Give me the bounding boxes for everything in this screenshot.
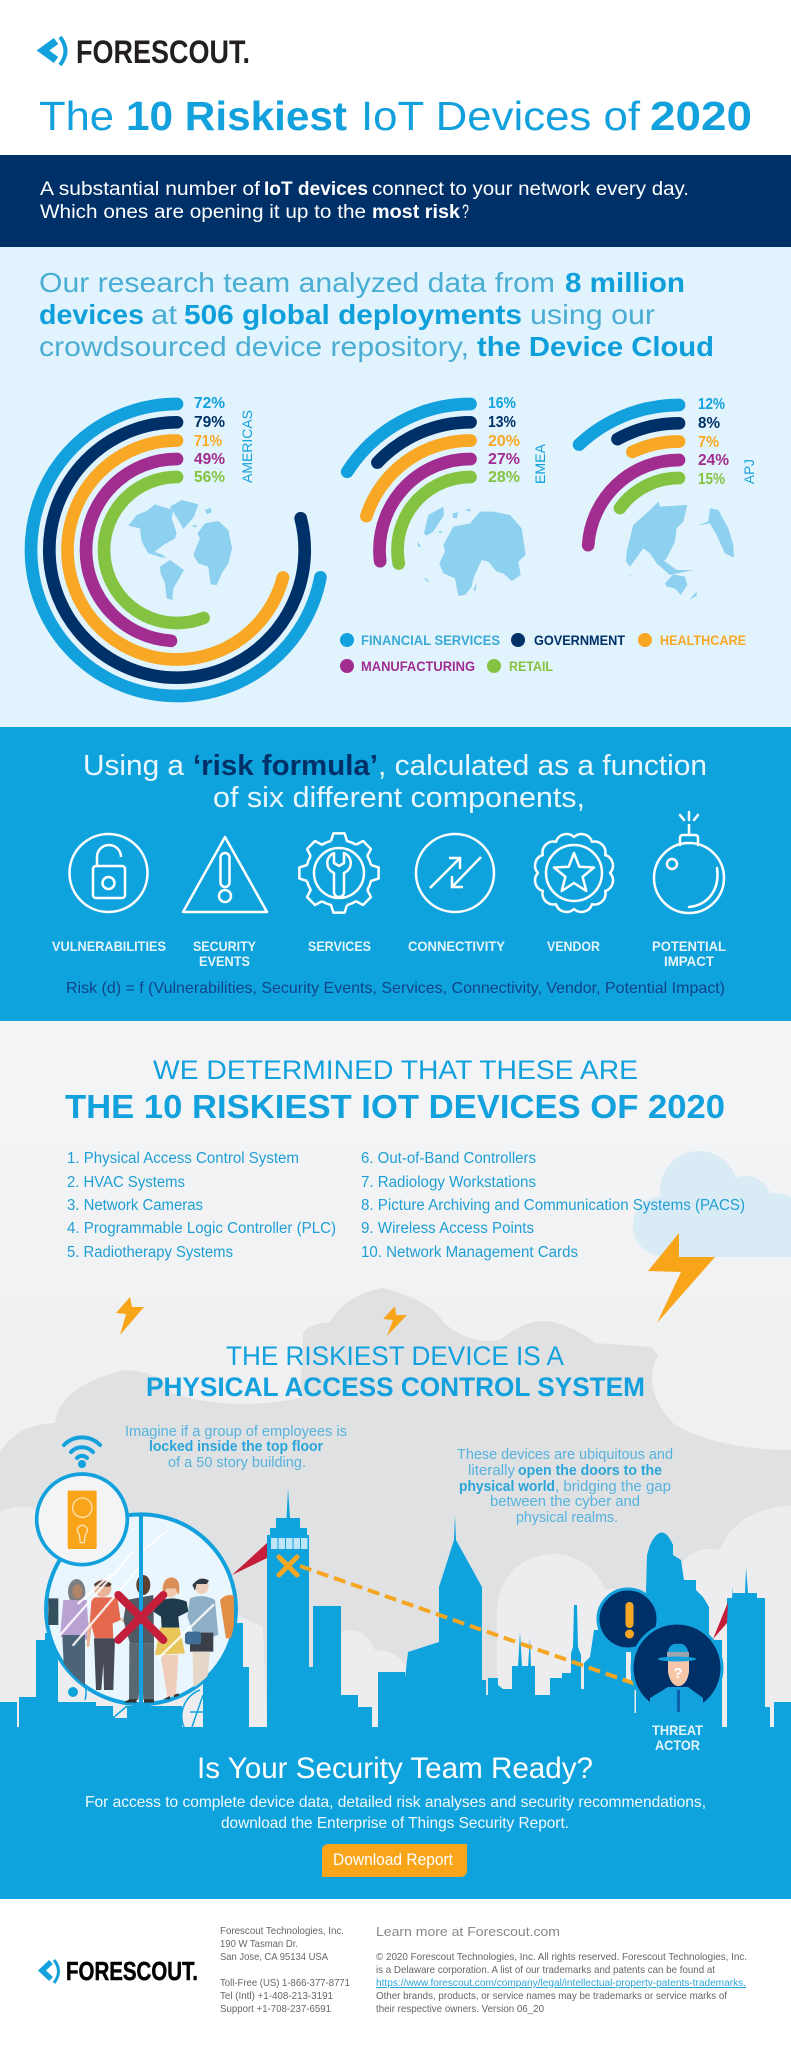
region label: APJ: APJ bbox=[742, 459, 757, 484]
legal text: their respective owners. Version 06_20 bbox=[376, 2003, 544, 2015]
map: Americas bbox=[128, 500, 232, 600]
legal text: © 2020 Forescout Technologies, Inc. All rights reserved. Forescout Technologies, Inc. bbox=[376, 1951, 747, 1963]
values: Americas: 72% bbox=[194, 395, 225, 412]
heading: top ten: THE 10 RISKIEST IOT DEVICES OF 2020 bbox=[65, 1088, 725, 1125]
ring chart: APJ bbox=[533, 405, 791, 697]
text: ubiquitous devices: physical realms. bbox=[516, 1510, 618, 1526]
text: imagine scenario: of a 50 story building. bbox=[168, 1455, 306, 1471]
icon: open padlock bbox=[70, 834, 148, 912]
device list: 4. Programmable Logic Controller (PLC) bbox=[67, 1220, 336, 1237]
values: EMEA: 16% bbox=[488, 395, 516, 412]
icon: connectivity arrows bbox=[416, 834, 494, 912]
component labels bbox=[52, 938, 726, 969]
research statement bbox=[39, 267, 714, 362]
heading: top ten: WE DETERMINED THAT THESE ARE bbox=[153, 1055, 638, 1085]
legal text: Other brands, products, or service names may be trademarks or service marks of bbox=[376, 1990, 727, 2002]
heading: risk formula: ‘risk formula’ bbox=[193, 750, 378, 782]
device list bbox=[67, 1150, 745, 1261]
icon: vendor star badge bbox=[535, 834, 613, 912]
legend: GOVERNMENT bbox=[534, 633, 626, 648]
contact details: Toll-Free (US) 1-866-377-8771 bbox=[220, 1977, 350, 1989]
device list: 8. Picture Archiving and Communication Systems (PACS) bbox=[361, 1197, 745, 1214]
values: EMEA: 28% bbox=[488, 469, 520, 486]
heading: risk formula: Using a bbox=[83, 750, 185, 782]
label: threat actor: THREAT bbox=[652, 1722, 703, 1738]
text: ubiquitous devices bbox=[457, 1447, 673, 1526]
research statement: the Device Cloud bbox=[477, 331, 714, 362]
icon: warning triangle bbox=[183, 837, 267, 912]
title: 10 Riskiest bbox=[126, 93, 347, 139]
device list: 9. Wireless Access Points bbox=[361, 1220, 534, 1237]
text: ubiquitous devices: open the doors to the bbox=[518, 1463, 662, 1479]
ring chart: Americas bbox=[31, 404, 323, 696]
legend: HEALTHCARE bbox=[660, 633, 746, 648]
icon: large lightning bolt bbox=[648, 1233, 715, 1323]
device list: 1. Physical Access Control System bbox=[67, 1150, 299, 1167]
title: 2020 bbox=[650, 93, 752, 139]
footer logo bbox=[42, 1956, 198, 1986]
icon: small lightning bolt left bbox=[116, 1297, 144, 1335]
panel: intro band: IoT devices bbox=[264, 179, 368, 200]
panel: research data bbox=[0, 247, 791, 727]
region label: Americas: AMERICAS bbox=[240, 410, 255, 483]
panel: intro band: ? bbox=[462, 202, 469, 223]
glass reflections bbox=[60, 1530, 213, 1658]
research statement: 506 global deployments bbox=[184, 299, 522, 330]
device list: 7. Radiology Workstations bbox=[361, 1174, 536, 1191]
component labels: SERVICES bbox=[308, 938, 371, 954]
device list: 2. HVAC Systems bbox=[67, 1174, 185, 1191]
values: Americas: 56% bbox=[194, 469, 225, 486]
legend: MANUFACTURING bbox=[361, 659, 475, 674]
values: APJ: 8% bbox=[698, 415, 720, 432]
skyline details bbox=[17, 1652, 636, 1727]
contact details: San Jose, CA 95134 USA bbox=[220, 1951, 328, 1963]
title bbox=[39, 93, 752, 139]
call to action text: For access to complete device data, detailed risk analyses and security recommendations, bbox=[85, 1794, 706, 1811]
call to action text bbox=[85, 1794, 706, 1832]
values: APJ: 12% bbox=[698, 396, 725, 413]
heading: risk formula: of six different components, bbox=[213, 782, 585, 814]
research statement: crowdsourced device repository, bbox=[39, 331, 469, 362]
values: Americas: 79% bbox=[194, 414, 225, 431]
title: The bbox=[39, 93, 114, 139]
red pointer to threat actor bbox=[713, 1602, 728, 1639]
header panel bbox=[0, 0, 791, 155]
door divider bbox=[139, 1515, 143, 1703]
device list: 5. Radiotherapy Systems bbox=[67, 1244, 233, 1261]
red pointer to tower bbox=[232, 1543, 267, 1575]
light foreground clouds bbox=[0, 1505, 791, 1730]
text: imagine scenario: Imagine if a group of employees is bbox=[125, 1424, 347, 1440]
icon: bomb bbox=[654, 812, 724, 913]
component labels: POTENTIAL bbox=[652, 938, 726, 954]
contact details: Tel (Intl) +1-408-213-3191 bbox=[220, 1990, 333, 2002]
contact details: 190 W Tasman Dr. bbox=[220, 1938, 298, 1950]
component labels: SECURITY bbox=[193, 938, 257, 954]
research statement: devices bbox=[39, 299, 144, 330]
icon: orange cross on tower bbox=[279, 1557, 297, 1575]
panel: intro band: Which ones are opening it up to the bbox=[40, 202, 366, 223]
panel: intro band bbox=[0, 155, 791, 247]
heading: risk formula: , calculated as a function bbox=[378, 750, 707, 782]
storm cloud backdrop bbox=[0, 1288, 791, 1730]
ring chart: EMEA bbox=[324, 404, 616, 696]
icon: gear with wrench bbox=[299, 833, 379, 913]
device list: 6. Out-of-Band Controllers bbox=[361, 1150, 536, 1167]
button: download report bbox=[322, 1844, 467, 1877]
values: EMEA: 27% bbox=[488, 451, 520, 468]
formula text: Risk (d) = f (Vulnerabilities, Security Events, Services, Connectivity, Vendor, Potential Impact) bbox=[66, 980, 725, 997]
threat actor bbox=[632, 1623, 722, 1713]
research statement: using our bbox=[530, 299, 655, 330]
panel: intro band: connect to your network every day. bbox=[372, 179, 689, 200]
legal text: https://www.forescout.com/company/legal/intellectual-property-patents-trademarks. bbox=[376, 1977, 746, 1989]
text: ubiquitous devices: between the cyber and bbox=[490, 1494, 640, 1510]
icon: small lightning bolt center bbox=[383, 1306, 407, 1336]
panel: riskiest devices bbox=[0, 1021, 791, 1731]
text: ubiquitous devices: , bridging the gap bbox=[555, 1479, 671, 1495]
component labels: CONNECTIVITY bbox=[408, 938, 506, 954]
panel: risk formula bbox=[0, 727, 791, 1021]
door lock callout bbox=[37, 1474, 127, 1565]
call to action text: download the Enterprise of Things Security Report. bbox=[221, 1815, 569, 1832]
panel: footer bbox=[0, 1899, 791, 2048]
legal text: is a Delaware corporation. A list of our trademarks and patents can be found at bbox=[376, 1964, 715, 1976]
legend: FINANCIAL SERVICES bbox=[361, 633, 500, 648]
heading: top ten bbox=[65, 1055, 725, 1125]
learn more: Learn more at Forescout.com bbox=[376, 1924, 560, 1939]
values: APJ: 24% bbox=[698, 452, 729, 469]
button: download report: Download Report bbox=[333, 1850, 453, 1869]
research statement: 8 million bbox=[565, 267, 685, 298]
employees group bbox=[48, 1575, 234, 1703]
text: ubiquitous devices: physical world bbox=[459, 1479, 555, 1495]
values: APJ: 7% bbox=[698, 434, 719, 451]
city skyline bbox=[0, 1488, 791, 1735]
alert bubble bbox=[598, 1589, 658, 1649]
text: ubiquitous devices: literally bbox=[468, 1463, 516, 1479]
values: APJ bbox=[698, 396, 729, 488]
region label: EMEA: EMEA bbox=[533, 444, 548, 484]
research statement: Our research team analyzed data from bbox=[39, 267, 555, 298]
values: EMEA bbox=[488, 395, 520, 486]
legend: RETAIL bbox=[509, 659, 553, 674]
heading: security team ready: Is Your Security Team Ready? bbox=[197, 1752, 593, 1785]
heading: riskiest device: THE RISKIEST DEVICE IS A bbox=[226, 1341, 564, 1371]
title: IoT Devices of bbox=[361, 93, 641, 139]
footer logo: FORESCOUT. bbox=[66, 1956, 198, 1986]
component labels: EVENTS bbox=[199, 953, 250, 969]
contact details: Support +1-708-237-6591 bbox=[220, 2003, 331, 2015]
contact details bbox=[220, 1925, 350, 2015]
locked door glass with employees bbox=[46, 1514, 236, 1704]
cloud: top right bbox=[633, 1151, 791, 1257]
text: imagine scenario bbox=[125, 1424, 347, 1471]
values: APJ: 15% bbox=[698, 471, 725, 488]
contact details: Forescout Technologies, Inc. bbox=[220, 1925, 344, 1937]
legend bbox=[340, 633, 746, 674]
values: Americas: 71% bbox=[194, 433, 222, 450]
panel: call to action bbox=[0, 1437, 791, 1899]
panel: intro band: most risk bbox=[372, 202, 460, 223]
component labels: VENDOR bbox=[547, 938, 600, 954]
red cross bbox=[118, 1595, 163, 1640]
panel: intro band: A substantial number of bbox=[40, 179, 261, 200]
text: ubiquitous devices: These devices are ubiquitous and bbox=[457, 1447, 673, 1463]
heading: riskiest device: PHYSICAL ACCESS CONTROL SYSTEM bbox=[146, 1372, 645, 1402]
heading: risk formula bbox=[83, 750, 707, 814]
icon: wifi bbox=[64, 1437, 100, 1466]
research statement: at bbox=[151, 299, 177, 330]
values: EMEA: 13% bbox=[488, 414, 516, 431]
tower windows bbox=[271, 1538, 308, 1549]
values: Americas: 49% bbox=[194, 451, 225, 468]
component labels: IMPACT bbox=[664, 953, 714, 969]
device list: 3. Network Cameras bbox=[67, 1197, 203, 1214]
legal text bbox=[376, 1951, 747, 2015]
values: Americas bbox=[194, 395, 225, 486]
threat actor: ? bbox=[673, 1665, 683, 1682]
logo: Forescout: FORESCOUT. bbox=[76, 34, 250, 70]
map: EMEA and APJ bbox=[417, 502, 734, 600]
label: threat actor bbox=[652, 1722, 703, 1753]
device list: 10. Network Management Cards bbox=[361, 1244, 578, 1261]
component labels: VULNERABILITIES bbox=[52, 938, 166, 954]
values: EMEA: 20% bbox=[488, 433, 520, 450]
attack path dashed line bbox=[300, 1566, 647, 1688]
text: imagine scenario: locked inside the top floor bbox=[149, 1439, 323, 1455]
heading: riskiest device bbox=[146, 1341, 645, 1402]
label: threat actor: ACTOR bbox=[655, 1737, 700, 1753]
